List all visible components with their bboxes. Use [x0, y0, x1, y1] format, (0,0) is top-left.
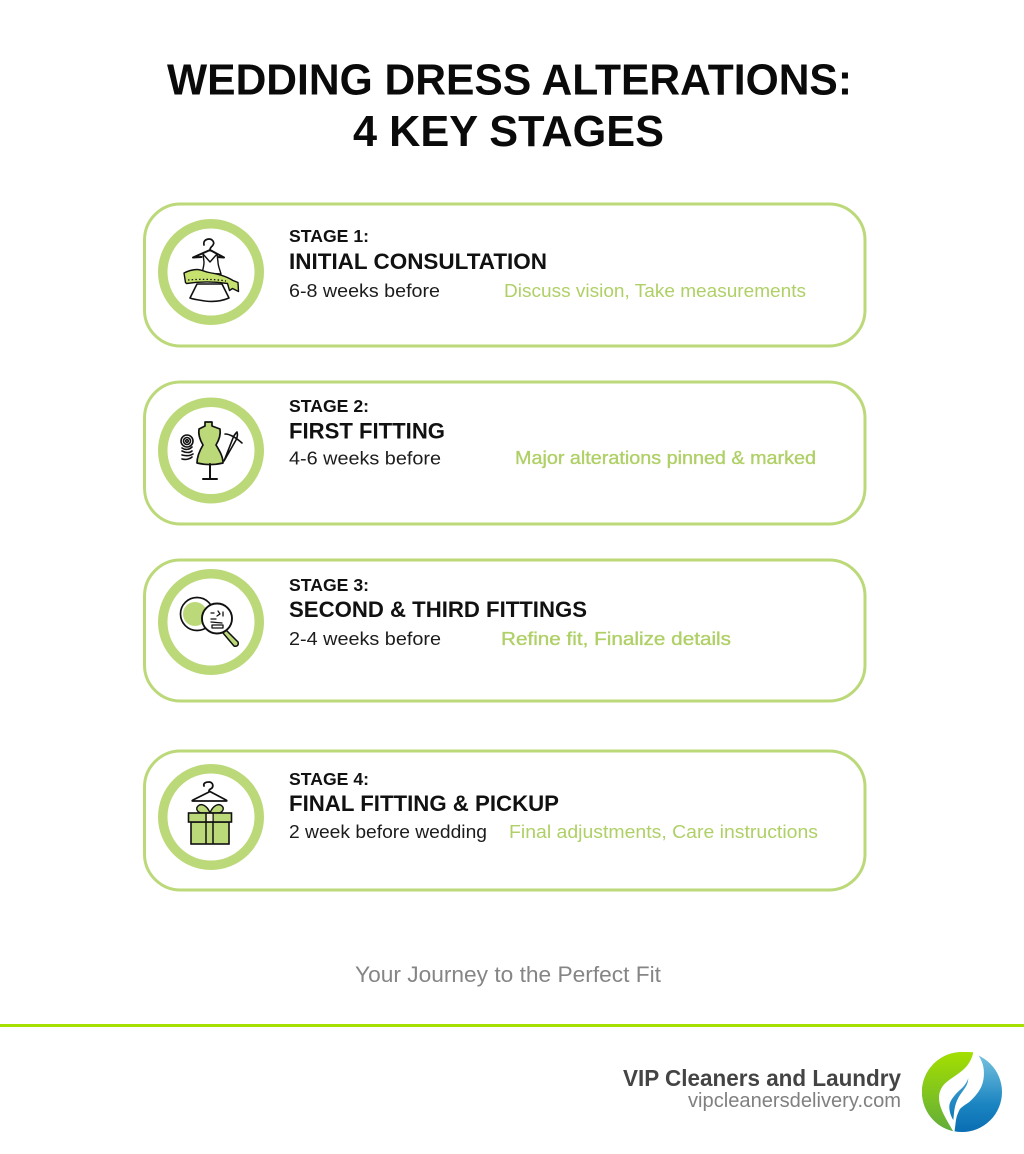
logo: [922, 1052, 1002, 1132]
icon ring: [163, 224, 259, 320]
stage label: STAGE 1:: [289, 226, 369, 246]
panel: stage 4 final fitting and pickup: [144, 751, 865, 890]
panel: stage 3 second and third fittings: [144, 560, 865, 701]
description: Discuss vision, Take measurements: [504, 280, 806, 301]
panel: stage 2 first fitting: [144, 382, 865, 524]
title: 4 KEY STAGES: [353, 108, 664, 156]
timing: 2 week before wedding: [289, 821, 487, 842]
title: [167, 56, 852, 156]
description: Final adjustments, Care instructions: [509, 821, 818, 842]
description: Refine fit, Finalize details: [501, 628, 731, 649]
stage label: STAGE 3:: [289, 575, 369, 595]
title: WEDDING DRESS ALTERATIONS:: [167, 56, 852, 104]
icon ring: [163, 402, 259, 499]
stage label: STAGE 4:: [289, 769, 369, 789]
footer website: vipcleanersdelivery.com: [688, 1090, 901, 1112]
icon: magnifying glass over fabric: [180, 598, 238, 646]
icon: gift box with hanger: [188, 782, 232, 844]
panel: stage 1 initial consultation: [144, 204, 865, 346]
card outline: [144, 751, 865, 890]
stage heading: SECOND & THIRD FITTINGS: [289, 597, 587, 622]
stage label: STAGE 2:: [289, 396, 369, 416]
icon: dress form with thread and needle: [181, 422, 242, 479]
timing: 4-6 weeks before: [289, 448, 441, 468]
icon: dress with tape measure: [184, 239, 238, 301]
card outline: [144, 560, 865, 701]
timing: 6-8 weeks before: [289, 280, 440, 301]
stage heading: FIRST FITTING: [289, 418, 445, 444]
footer brand name: VIP Cleaners and Laundry: [623, 1065, 901, 1091]
tagline: Your Journey to the Perfect Fit: [355, 962, 662, 987]
timing: 2-4 weeks before: [289, 628, 441, 649]
stage heading: FINAL FITTING & PICKUP: [289, 791, 559, 816]
icon ring: [163, 769, 259, 865]
stage heading: INITIAL CONSULTATION: [289, 249, 547, 274]
card outline: [144, 204, 865, 346]
icon ring: [163, 574, 259, 670]
card outline: [144, 382, 865, 524]
description: Major alterations pinned & marked: [515, 447, 816, 468]
